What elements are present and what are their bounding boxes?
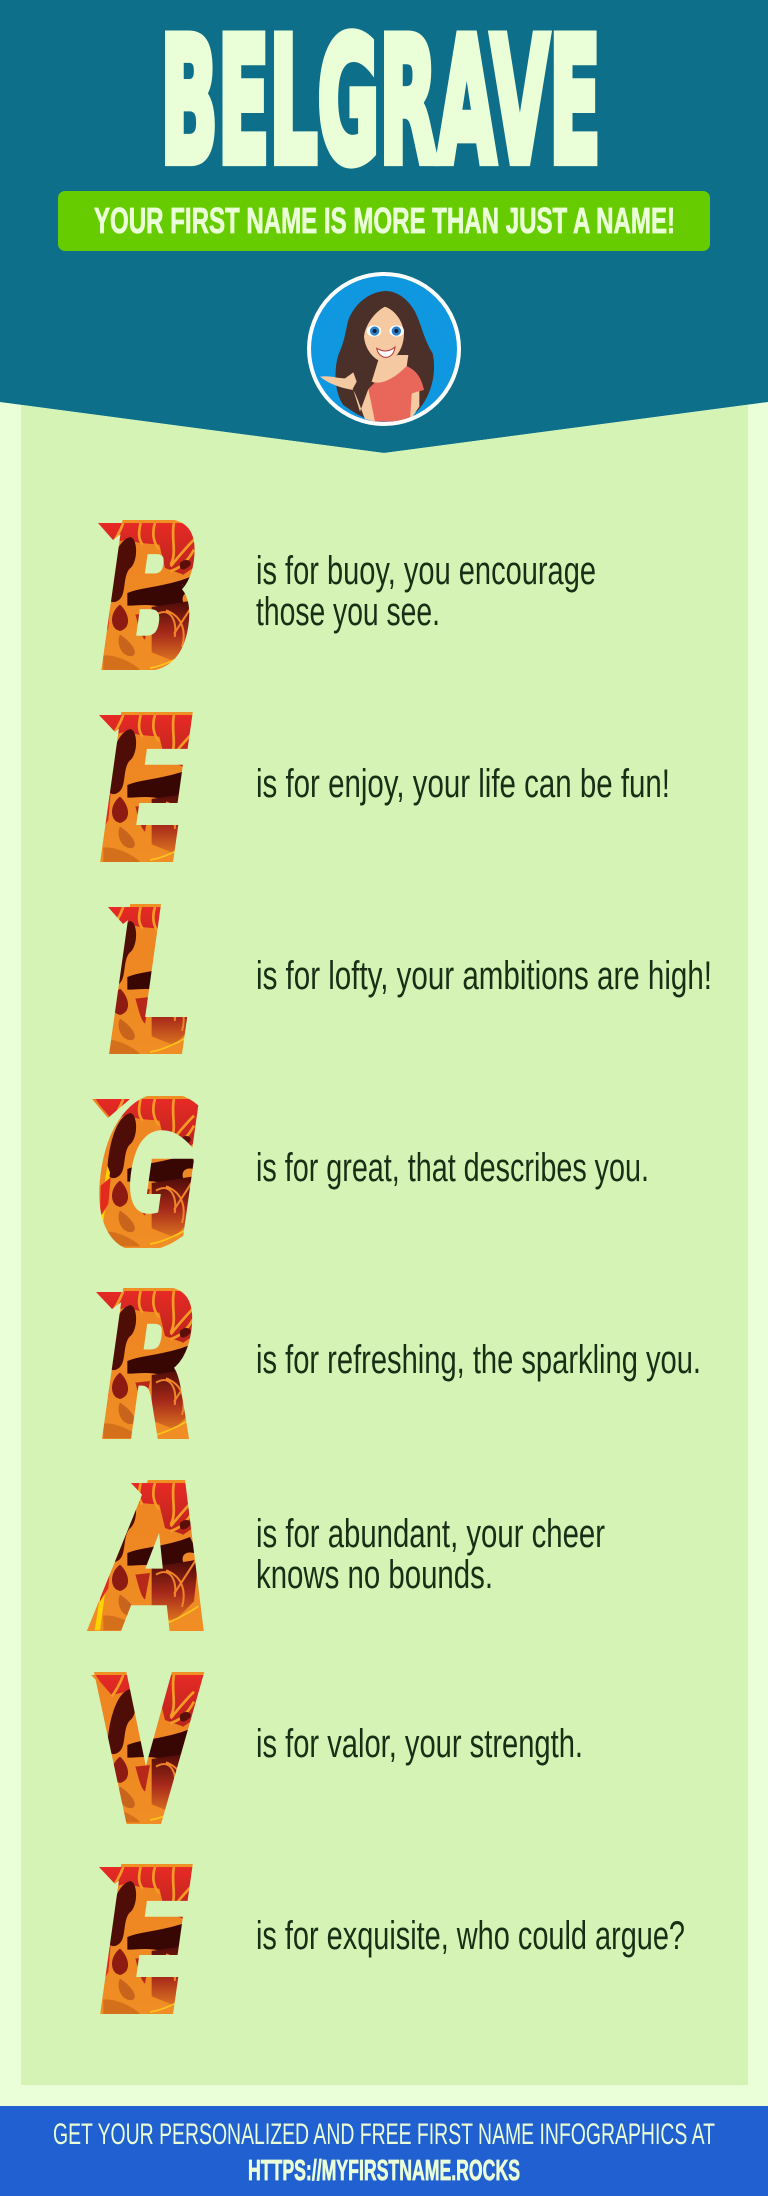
row 6: letter A: [84, 1480, 208, 1631]
row 8: letter E: [99, 1864, 193, 2014]
header background: [0, 0, 768, 460]
row 6: text: [256, 1512, 605, 1597]
row 4: letter G: [88, 1096, 204, 1248]
row 1: text: those you see.: [256, 590, 440, 634]
row 6: text: is for abundant, your cheer: [256, 1512, 605, 1556]
row 1: text: [256, 549, 596, 634]
title: BELGRAVE: [160, 3, 601, 202]
footer: [0, 2106, 768, 2196]
footer line 2: HTTPS://MYFIRSTNAME.ROCKS: [248, 2155, 520, 2187]
row 3: letter L: [108, 904, 188, 1054]
row 2: letter E: [99, 712, 193, 862]
row 7: letter V: [88, 1672, 206, 1824]
avatar: [309, 274, 459, 424]
row 6: text: knows no bounds.: [256, 1553, 493, 1597]
subtitle banner: [58, 191, 710, 251]
row 5: letter R: [96, 1288, 192, 1439]
banner background: [58, 191, 710, 251]
row 1: text: is for buoy, you encourage: [256, 549, 596, 593]
row 1: letter B: [98, 520, 195, 670]
content panel border: [0, 402, 768, 2106]
row 7: text: is for valor, your strength.: [256, 1722, 583, 1766]
footer background: [0, 2106, 768, 2196]
content panel: [21, 405, 748, 2085]
